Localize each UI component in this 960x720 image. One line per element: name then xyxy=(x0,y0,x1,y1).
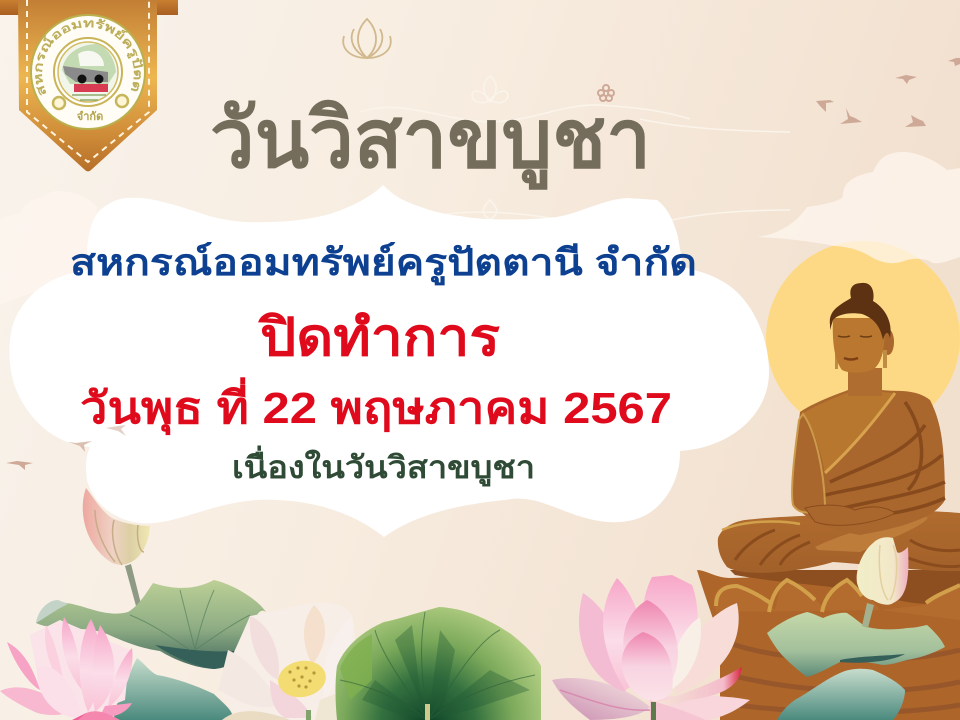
face xyxy=(833,318,885,373)
icon: faint birds over cloud edge xyxy=(68,425,126,452)
icon: ribbon badge with cooperative seal xyxy=(0,0,178,172)
robe legs xyxy=(718,511,960,573)
icon: halo xyxy=(766,241,960,435)
text block: closing date: วันพุธ ที่ 22 พฤษภาคม 2567 xyxy=(80,377,672,436)
seal: จำกัด xyxy=(77,110,103,123)
title: วันวิสาขบูชา xyxy=(210,94,651,190)
seal xyxy=(30,14,146,130)
hands xyxy=(805,505,895,525)
neck xyxy=(848,368,882,396)
lotus pedestal xyxy=(697,570,960,720)
icon: seated Buddha statue xyxy=(697,283,960,720)
icon: pink lotus left xyxy=(0,617,133,720)
icon: pink lotus right xyxy=(552,575,750,720)
icon: lotus ornament xyxy=(343,19,391,58)
text block: organisation name: สหกรณ์ออมทรัพย์ครูปัตตานี จำกัด xyxy=(70,242,697,286)
icon: teal lotus leaf lower xyxy=(114,658,232,720)
icon: flying birds xyxy=(6,58,960,470)
ears xyxy=(882,329,894,355)
left arm edge xyxy=(792,414,825,513)
hair and ushnisha xyxy=(830,283,891,340)
torso xyxy=(795,390,945,535)
icon: lotus bud and leaves right xyxy=(767,537,945,720)
text block: closed notice: ปิดทำการ xyxy=(258,309,500,367)
icon: small flower ornament xyxy=(598,85,614,101)
icon: white lotus xyxy=(218,603,355,720)
icon: lotus leaf upper left xyxy=(36,580,266,669)
decorative flourish lines xyxy=(360,76,790,220)
icon: lotus bud left xyxy=(83,488,150,606)
panel: white cloud shape xyxy=(9,185,769,537)
icon: large green lotus leaf xyxy=(336,607,541,720)
closed eyes and mouth xyxy=(838,336,872,337)
background clouds xyxy=(0,152,960,305)
text block: reason: เนื่องในวันวิสาขบูชา xyxy=(232,445,535,487)
